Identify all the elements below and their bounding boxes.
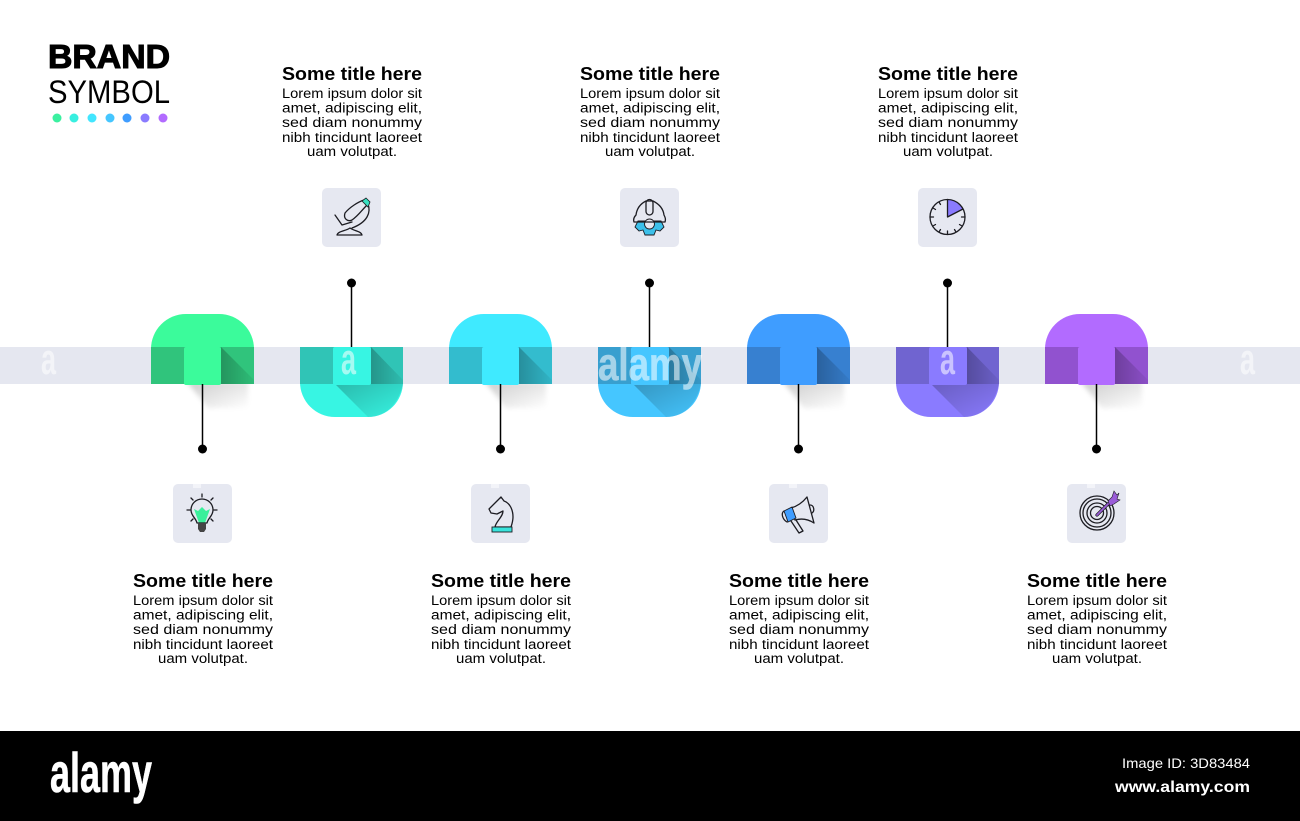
text block: step 7: Lorem ipsum dolor sit	[1027, 593, 1167, 608]
image id: Image ID: 3D83484	[1122, 755, 1250, 771]
text block: step 2: Lorem ipsum dolor sit	[282, 86, 422, 101]
text block: step 2: Some title here	[282, 63, 422, 84]
watermark overlay: a	[341, 335, 356, 384]
text block: step 5: Lorem ipsum dolor sit	[729, 593, 869, 608]
step 5 marker: blue, up	[747, 314, 850, 408]
connector step 4	[645, 278, 654, 347]
icon: chess knight	[471, 484, 530, 543]
text block: step 7: amet, adipiscing elit,	[1027, 608, 1167, 622]
connector step 5	[794, 384, 803, 454]
text block: step 5: nibh tincidunt laoreet	[729, 637, 869, 652]
text block: step 6: sed diam nonummy	[878, 115, 1018, 130]
step 2 marker: teal, down	[300, 347, 403, 417]
horizontal timeline band	[0, 347, 1300, 384]
text block: step 6: amet, adipiscing elit,	[878, 100, 1018, 116]
logo: brand symbol	[48, 38, 170, 122]
text block: step 4: uam volutpat.	[605, 144, 695, 159]
text block: step 7: sed diam nonummy	[1027, 622, 1167, 637]
icon: microscope	[322, 188, 381, 247]
watermark overlay	[41, 335, 1255, 390]
text block: step 7: nibh tincidunt laoreet	[1027, 637, 1167, 652]
logo: brand symbol: BRAND	[48, 38, 170, 75]
text block: step 7: uam volutpat.	[1052, 651, 1142, 666]
footer bar	[0, 731, 1300, 821]
text block: step 6: Lorem ipsum dolor sit	[878, 86, 1018, 101]
watermark overlay: a	[41, 335, 56, 384]
text block: step 4: sed diam nonummy	[580, 115, 720, 130]
text block: step 5: Some title here	[729, 570, 869, 591]
text block: step 5: amet, adipiscing elit,	[729, 608, 869, 622]
icon: target with dart	[1067, 484, 1126, 543]
icon: hard hat with gear	[620, 188, 679, 247]
text block: step 3: sed diam nonummy	[431, 622, 571, 637]
text block: step 3: amet, adipiscing elit,	[431, 608, 571, 622]
icon: light bulb	[173, 484, 232, 543]
watermark overlay: a	[940, 335, 955, 384]
step 6 marker: violet, down	[896, 347, 999, 417]
connector step 1	[198, 384, 207, 454]
text block: step 3: Lorem ipsum dolor sit	[431, 593, 571, 608]
text block: step 2: amet, adipiscing elit,	[282, 100, 422, 116]
text block: step 5: sed diam nonummy	[729, 622, 869, 637]
icon: clock	[918, 188, 977, 247]
connector step 6	[943, 278, 952, 347]
step 3 marker: cyan, up	[449, 314, 552, 408]
text block: step 6: nibh tincidunt laoreet	[878, 130, 1018, 145]
text block: step 4: amet, adipiscing elit,	[580, 100, 720, 116]
text block: step 7	[1027, 570, 1167, 666]
text block: step 3: nibh tincidunt laoreet	[431, 637, 571, 652]
text block: step 1: Some title here	[133, 570, 273, 591]
text block: step 1: amet, adipiscing elit,	[133, 608, 273, 622]
text block: step 3	[431, 570, 571, 666]
text block: step 4: Lorem ipsum dolor sit	[580, 86, 720, 101]
text block: step 6: uam volutpat.	[903, 144, 993, 159]
text block: step 4: nibh tincidunt laoreet	[580, 130, 720, 145]
text block: step 2: nibh tincidunt laoreet	[282, 130, 422, 145]
connector step 2	[347, 278, 356, 347]
icon: megaphone	[769, 484, 828, 543]
connector step 7	[1092, 384, 1101, 454]
text block: step 1: sed diam nonummy	[133, 622, 273, 637]
text block: step 1: uam volutpat.	[158, 651, 248, 666]
text block: step 7: Some title here	[1027, 570, 1167, 591]
text block: step 1: Lorem ipsum dolor sit	[133, 593, 273, 608]
footer logo: alamy	[50, 741, 152, 804]
text block: step 2	[282, 63, 422, 159]
text block: step 5	[729, 570, 869, 666]
logo: brand symbol: SYMBOL	[48, 74, 170, 110]
text block: step 6: Some title here	[878, 63, 1018, 84]
text block: step 5: uam volutpat.	[754, 651, 844, 666]
step 1 marker: green, up	[151, 314, 254, 408]
text block: step 1	[133, 570, 273, 666]
watermark overlay: a	[1240, 335, 1255, 384]
watermark overlay: alamy	[598, 338, 702, 390]
text block: step 3: uam volutpat.	[456, 651, 546, 666]
connector step 3	[496, 384, 505, 454]
text block: step 1: nibh tincidunt laoreet	[133, 637, 273, 652]
text block: step 2: sed diam nonummy	[282, 115, 422, 130]
step 4 marker: sky blue, down	[598, 347, 701, 417]
step 7 marker: purple, up	[1045, 314, 1148, 408]
text block: step 6	[878, 63, 1018, 159]
text block: step 4: Some title here	[580, 63, 720, 84]
text block: step 3: Some title here	[431, 570, 571, 591]
text block: step 4	[580, 63, 720, 159]
website: www.alamy.com	[1114, 779, 1250, 796]
text block: step 2: uam volutpat.	[307, 144, 397, 159]
